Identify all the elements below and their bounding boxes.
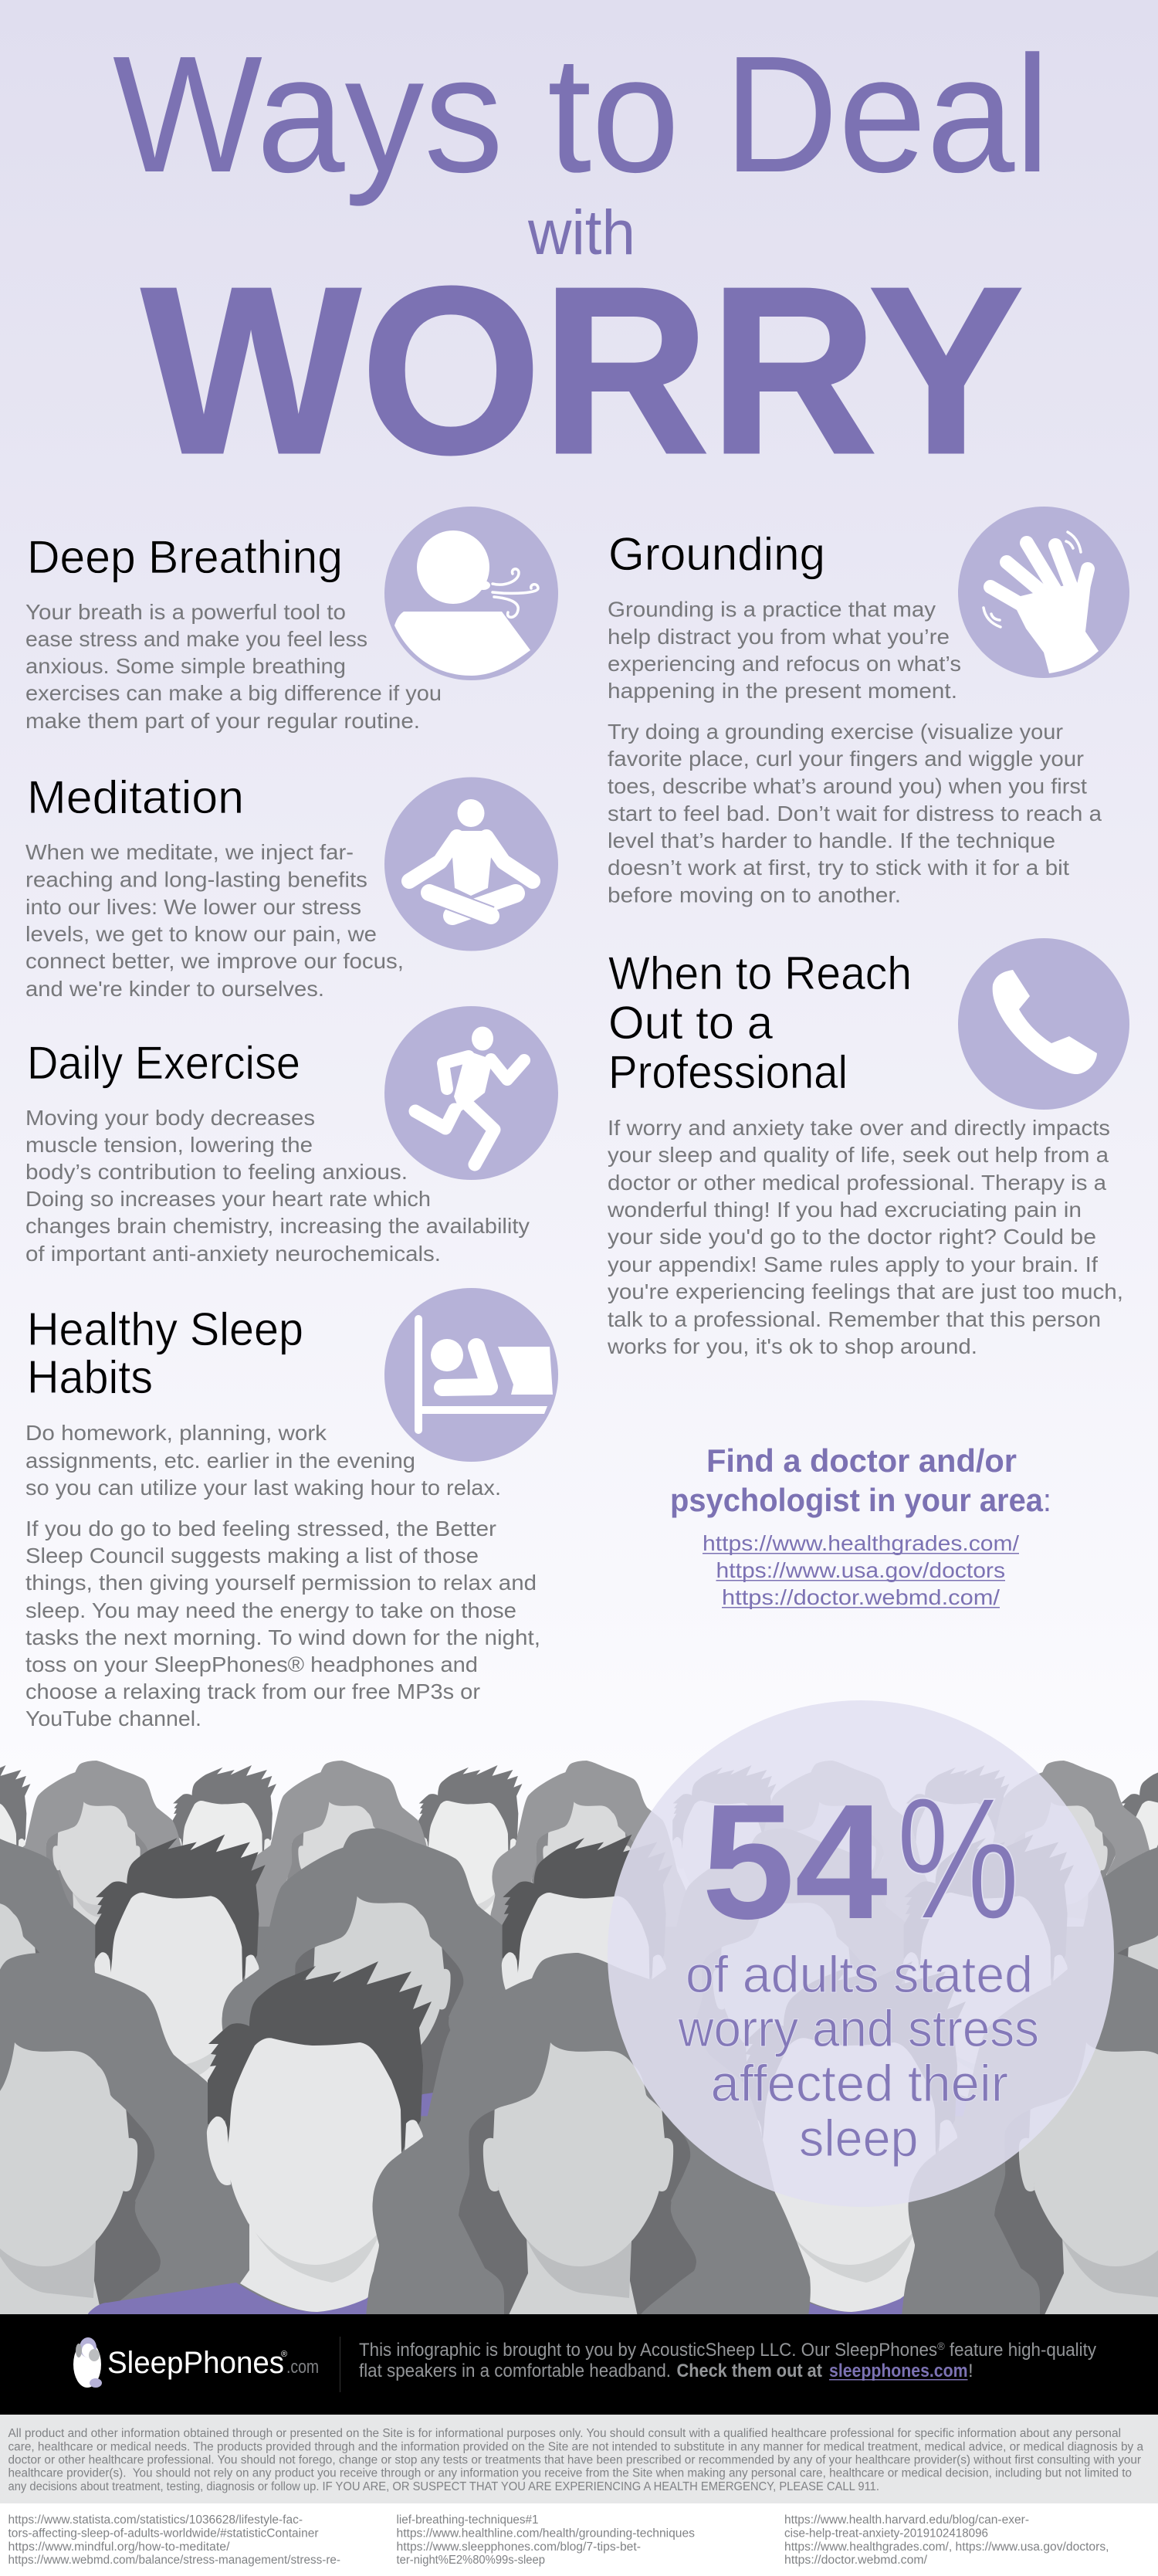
callout heading [670, 1442, 1051, 1518]
text: healthy sleep body: assignments, etc. earlier in the evening [25, 1449, 415, 1473]
sources column 3: cise-help-treat-anxiety-2019102418096 [784, 2527, 988, 2540]
text: professional body: your appendix! Same rules apply to your brain. If [608, 1252, 1098, 1276]
text: daily exercise body: Moving your body decreases [25, 1106, 315, 1130]
text: deep breathing body: exercises can make a big difference if you [25, 681, 442, 705]
icon: telephone [958, 938, 1129, 1110]
heading: when to reach out to a professional: Professional [608, 1046, 848, 1098]
sponsor text [359, 2340, 1096, 2381]
callout links [703, 1531, 1019, 1609]
panel: healthy sleep habits [25, 1288, 558, 1730]
text: grounding body: toes, describe what’s around you) when you first [608, 774, 1087, 798]
text: healthy sleep body: tasks the next morning. To wind down for the night, [25, 1625, 540, 1649]
sponsor text: sleepphones.com [829, 2361, 968, 2381]
text: healthy sleep body: YouTube channel. [25, 1707, 201, 1730]
sources column 3: https://doctor.webmd.com/ [784, 2554, 928, 2567]
text: professional body [607, 1116, 1123, 1358]
text: healthy sleep body: things, then giving yourself permission to relax and [25, 1571, 537, 1595]
text: meditation body: into our lives: We lower our stress [25, 895, 361, 919]
disclaimer panel [0, 2415, 1158, 2503]
panel: when to reach out to a professional [607, 938, 1129, 1358]
text: grounding body: level that’s harder to handle. If the technique [608, 829, 1055, 852]
text: deep breathing body: make them part of your regular routine. [25, 709, 420, 733]
sources panel [0, 2503, 1158, 2576]
front row of people [0, 1953, 1158, 2332]
icon: runner [384, 1006, 558, 1180]
text: daily exercise body: body’s contribution to feeling anxious. [25, 1160, 408, 1184]
icon: meditating figure [384, 777, 558, 951]
panel: deep breathing [25, 507, 558, 733]
footer band [0, 2314, 1158, 2415]
text: professional body: works for you, it's ok to shop around. [607, 1334, 977, 1358]
disclaimer text [8, 2427, 1143, 2493]
heading: when to reach out to a professional: Out to a [608, 997, 774, 1049]
heading: daily exercise: Daily Exercise [27, 1037, 300, 1089]
text: meditation body: reaching and long-lasting benefits [25, 868, 367, 891]
text: healthy sleep body: Do homework, planning, work [25, 1421, 327, 1445]
text: grounding body [608, 598, 1102, 907]
text: daily exercise body: changes brain chemistry, increasing the availability [25, 1214, 530, 1238]
sources column 3: https://www.health.harvard.edu/blog/can-exer- [784, 2513, 1029, 2527]
text: healthy sleep body: choose a relaxing track from our free MP3s or [25, 1679, 480, 1703]
heading: healthy sleep habits [27, 1303, 303, 1403]
disclaimer text: doctor or other healthcare professional. You should not forego, change or stop any tests or treatments that have been prescribed or recommended by any of your healthcare provider(s) without first consulting with your [8, 2454, 1141, 2467]
text: grounding body: Grounding is a practice that may [608, 598, 936, 621]
icon: person in bed [384, 1288, 558, 1462]
logo wordmark: SleepPhones [107, 2346, 284, 2380]
sources column 2: ter-night%E2%80%99s-sleep [397, 2554, 545, 2567]
sources column 1: tors-affecting-sleep-of-adults-worldwide/#statisticContainer [8, 2527, 318, 2540]
text: professional body: your sleep and quality of life, seek out help from a [608, 1143, 1109, 1167]
text: deep breathing body: Your breath is a powerful tool to [25, 600, 346, 624]
sources column 1: https://www.webmd.com/balance/stress-management/stress-re- [8, 2554, 340, 2567]
sponsor text: ® [937, 2340, 945, 2352]
text: grounding body: before moving on to another. [608, 883, 901, 907]
stat circle [608, 1700, 1114, 2207]
sources column 1: https://www.statista.com/statistics/1036628/lifestyle-fac- [8, 2513, 303, 2527]
text: daily exercise body: Doing so increases your heart rate which [25, 1187, 431, 1211]
callout links: https://www.usa.gov/doctors [716, 1558, 1005, 1582]
text: professional body: wonderful thing! If you had excruciating pain in [607, 1198, 1082, 1222]
callout: find a doctor [670, 1442, 1051, 1609]
stat caption [678, 1946, 1039, 2168]
icon: person breathing [384, 507, 558, 680]
text: professional body: talk to a professional. Remember that this person [608, 1307, 1101, 1331]
text: grounding body: Try doing a grounding exercise (visualize your [608, 720, 1063, 744]
text: grounding body: experiencing and refocus on what’s [608, 652, 961, 676]
text: meditation body: and we're kinder to ourselves. [25, 977, 324, 1001]
sources column 2 [397, 2513, 695, 2567]
text: deep breathing body: ease stress and make you feel less [25, 627, 367, 651]
text: meditation body: When we meditate, we inject far- [25, 840, 354, 864]
stat number [702, 1762, 1020, 1955]
middle row of people [0, 1829, 1158, 2116]
text: grounding body: start to feel bad. Don’t wait for distress to reach a [608, 802, 1102, 825]
panel: 54% statistic [608, 1700, 1114, 2207]
sponsor text: flat speakers in a comfortable headband. [359, 2361, 671, 2381]
text: meditation body: levels, we get to know our pain, we [25, 922, 377, 946]
title line: with: with [527, 198, 635, 268]
text: grounding body: doesn’t work at first, try to stick with it for a bit [608, 856, 1069, 880]
heading: healthy sleep habits: Healthy Sleep [27, 1303, 303, 1355]
sponsor text: ! [968, 2361, 973, 2381]
stat caption: worry and stress [678, 2000, 1039, 2058]
stat caption: of adults stated [686, 1946, 1033, 2004]
text: grounding body: happening in the present moment. [608, 679, 957, 703]
heading: healthy sleep habits: Habits [27, 1351, 153, 1403]
heading: deep breathing: Deep Breathing [27, 531, 343, 583]
sources column 1: https://www.mindful.org/how-to-meditate/ [8, 2540, 230, 2554]
text: healthy sleep body: toss on your SleepPhones® headphones and [25, 1652, 478, 1676]
icon: sheep logo [73, 2337, 102, 2388]
text: daily exercise body: of important anti-anxiety neurochemicals. [25, 1242, 441, 1266]
callout links: https://www.healthgrades.com/ [703, 1531, 1019, 1555]
panel: grounding [608, 507, 1129, 907]
disclaimer text: All product and other information obtained through or presented on the Site is for informational purposes only. You should consult with a qualified healthcare professional for specific information about any personal [8, 2427, 1121, 2440]
title [113, 21, 1050, 503]
sources column 1 [8, 2513, 340, 2567]
sources column 2: https://www.sleepphones.com/blog/7-tips-bet- [397, 2540, 641, 2554]
logo wordmark: .com [286, 2357, 319, 2378]
disclaimer text: any decisions about treatment, testing, diagnosis or follow up. IF YOU ARE, OR SUSPECT THAT YOU ARE EXPERIENCING A HEALTH EMERGENCY, PLEASE CALL 911. [8, 2480, 879, 2493]
heading: meditation: Meditation [27, 771, 244, 823]
stat number: % [896, 1762, 1020, 1955]
heading: when to reach out to a professional: When to Reach [608, 947, 912, 999]
text: daily exercise body [25, 1106, 530, 1266]
heading: grounding: Grounding [608, 528, 825, 580]
title line: WORRY: WORRY [141, 238, 1024, 503]
logo wordmark: ® [281, 2350, 287, 2359]
sponsor text: Check them out at [676, 2361, 822, 2381]
panel: meditation [25, 771, 558, 1001]
text: meditation body: connect better, we improve our focus, [25, 949, 404, 973]
text: grounding body: favorite place, curl your fingers and wiggle your [608, 747, 1084, 771]
text: meditation body [25, 840, 404, 1001]
text: daily exercise body: muscle tension, lowering the [25, 1133, 313, 1157]
text: professional body: you're experiencing feelings that are just too much, [608, 1280, 1123, 1303]
text: healthy sleep body: If you do go to bed feeling stressed, the Better [25, 1517, 496, 1541]
disclaimer text: healthcare provider(s). You should not rely on any product you receive through or any information you receive from the Site when making any personal care, healthcare or medical decision, including but not limited to [8, 2467, 1132, 2480]
callout links: https://doctor.webmd.com/ [722, 1585, 1000, 1609]
callout heading: psychologist in your area: [670, 1482, 1051, 1518]
text: grounding body: help distract you from what you’re [608, 625, 950, 649]
disclaimer text: care, healthcare or medical needs. The products provided through and the information provided on the Site are not intended to substitute in any manner for medical treatment, medical advice, or medical diagnosis by a [8, 2440, 1143, 2453]
panel: daily exercise [25, 1006, 558, 1266]
sources column 2: lief-breathing-techniques#1 [397, 2513, 539, 2527]
heading: when to reach out to a professional [608, 947, 912, 1098]
title line: Ways to Deal: Ways to Deal [113, 21, 1050, 207]
text: deep breathing body [25, 600, 442, 733]
callout heading: Find a doctor and/or [706, 1442, 1017, 1479]
sponsor text: This infographic is brought to you by AcousticSheep LLC. Our SleepPhones [359, 2340, 980, 2361]
stat caption: sleep [799, 2110, 919, 2168]
text: healthy sleep body [25, 1421, 540, 1730]
stat number: 54 [702, 1770, 888, 1953]
sponsor text: feature high-quality [945, 2340, 1096, 2361]
sources column 3: https://www.healthgrades.com/, https://www.usa.gov/doctors, [784, 2540, 1109, 2554]
icon: wiggling hand [958, 507, 1129, 678]
text: professional body: If worry and anxiety take over and directly impacts [608, 1116, 1110, 1140]
sources column 3 [784, 2513, 1109, 2567]
text: deep breathing body: anxious. Some simple breathing [25, 654, 346, 678]
text: healthy sleep body: so you can utilize your last waking hour to relax. [25, 1476, 501, 1500]
illustration: crowd of people [0, 1761, 1158, 2332]
text: healthy sleep body: Sleep Council suggests making a list of those [25, 1544, 479, 1568]
sources column 2: https://www.healthline.com/health/grounding-techniques [397, 2527, 695, 2540]
text: professional body: doctor or other medical professional. Therapy is a [608, 1171, 1107, 1195]
text: professional body: your side you'd go to the doctor right? Could be [608, 1225, 1096, 1249]
back row of people [0, 1761, 1158, 1937]
text: healthy sleep body: sleep. You may need the energy to take on those [25, 1598, 516, 1622]
stat caption: affected their [710, 2055, 1008, 2113]
